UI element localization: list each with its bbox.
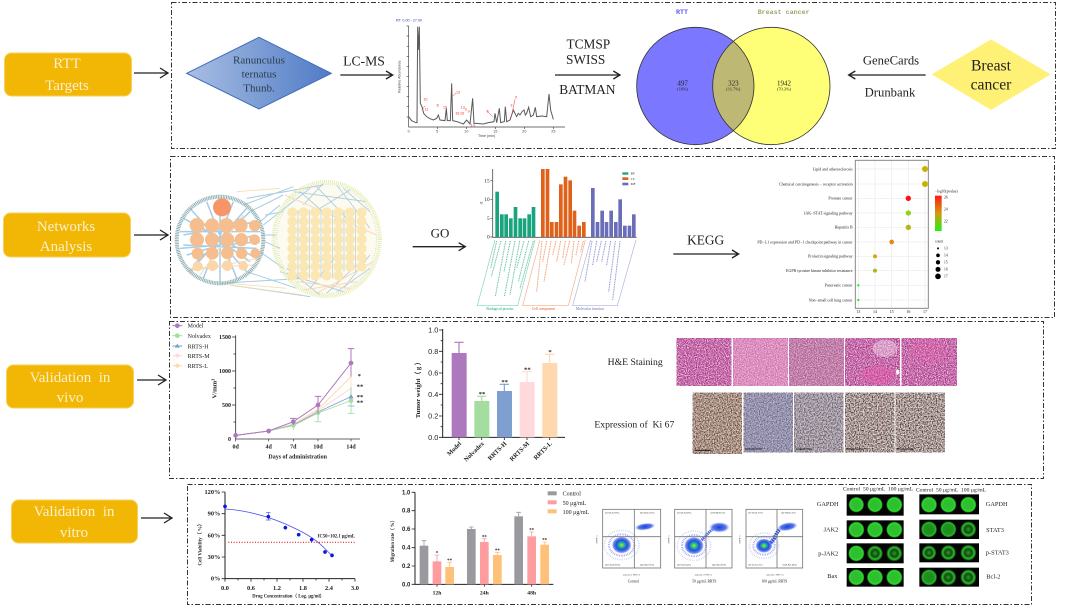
plot: control: Q2-UR(5.03%) — [640, 511, 655, 514]
chart: GO enrichment bars: 10 — [484, 197, 490, 203]
diamond: Breast cancer: cancer — [971, 76, 1012, 93]
chart: LC-MS chromatogram: 16 — [460, 112, 464, 116]
network diagram — [177, 182, 380, 297]
chart: cell viability dose response: 120% — [205, 489, 220, 496]
chart: tumour volume lines: 0 — [228, 437, 231, 443]
chart: LC-MS chromatogram: 13 — [461, 106, 465, 110]
step label: Validation in vivo: Validation in — [30, 370, 111, 386]
right section of network panel — [622, 160, 958, 314]
step label: Networks Analysis: Analysis — [40, 239, 92, 255]
chart: tumour weight bars: 0.2 — [428, 412, 438, 421]
protein labels: JAK2 — [824, 526, 838, 533]
chart: migration rate bars: ** — [482, 535, 487, 540]
chart: migration rate bars: 48h — [527, 591, 537, 597]
chart: tumour volume lines: ** — [357, 394, 364, 401]
chart: migration rate bars: 0.8 — [402, 509, 411, 515]
chart: LC-MS chromatogram: 11 — [425, 107, 428, 111]
arrow: GO — [413, 243, 465, 251]
plot: 100 μg/mL RRTS: Q4-LR(2.46%) — [783, 563, 797, 566]
chart: migration rate bars: ** — [447, 559, 453, 564]
plot: 50 μg/mL RRTS: Q3-LL(63.4%) — [677, 563, 691, 566]
chart: KEGG bubble plot: 17 — [923, 309, 927, 314]
chart: migration rate bars: ** — [542, 539, 548, 544]
plot: control: Q1-UL(0.93%) — [605, 511, 620, 514]
chart: cell viability dose response: 60% — [208, 532, 220, 539]
label: LC-MS: LC-MS — [343, 53, 385, 68]
labels: GeneCards, Drunbank: Drunbank — [865, 85, 916, 99]
arrow: Validation in vitro to panel — [141, 513, 172, 523]
step label: Validation in vitro: Validation in — [34, 504, 115, 520]
images: H&E stained sections — [677, 338, 957, 386]
left section of target panel — [187, 19, 620, 138]
chart: KEGG bubble plot: Lipid and atherosclerosis — [813, 166, 853, 171]
Venn diagram: 1942 — [777, 80, 791, 88]
right section of target panel — [637, 8, 1051, 145]
chart: KEGG bubble plot: Chemical carcinogenesis − receptor activation — [779, 181, 853, 186]
chart: migration rate bars: ** — [529, 529, 535, 534]
chart: tumour weight bars: 1.0 — [428, 326, 438, 335]
chart: GO enrichment bars: Cell component — [532, 307, 555, 311]
chart: tumour volume lines: V/mm³ — [211, 379, 218, 399]
plot: 50 μg/mL RRTS: Q4-LR(3.87%) — [712, 563, 726, 566]
chart: LC-MS chromatogram: 14 — [471, 124, 475, 128]
chart: migration rate bars: 0.0 — [402, 582, 411, 588]
step label: Validation in vitro — [12, 500, 138, 543]
chart: tumour volume lines: 0d — [233, 445, 239, 451]
chart: KEGG bubble plot: 13 — [856, 309, 860, 314]
chart: GO enrichment bars: Molecular function — [576, 307, 604, 311]
GO legend — [622, 172, 636, 186]
chart: LC-MS chromatogram: 6 — [487, 110, 489, 114]
chart: KEGG bubble plot: Prostate cancer — [828, 196, 853, 201]
legend: p-value colour scale — [935, 190, 958, 231]
protein labels — [817, 501, 1009, 580]
labels: TCMSP, SWISS, BATMAN: SWISS — [566, 52, 605, 67]
Venn diagram — [637, 8, 830, 145]
chart: KEGG bubble plot: Pancreatic cancer — [825, 283, 853, 288]
chart: cell viability dose response: IC50=102.1 μg/mL — [318, 534, 355, 539]
chart: tumour weight bars: Tumor weight（ g ） — [414, 358, 422, 418]
labels: GeneCards, Drunbank — [863, 54, 919, 99]
chart: tumour volume lines: 500 — [222, 403, 231, 409]
chart: cell viability dose response: 1.8 — [299, 585, 307, 592]
diamond: Breast cancer — [932, 39, 1051, 110]
chart: LC-MS chromatogram: 10 — [423, 98, 427, 102]
chart: tumour volume lines: * — [358, 373, 362, 380]
chart: tumour volume lines — [172, 323, 364, 461]
chart: KEGG bubble plot: PD−L1 expression and PD−1 checkpoint pathway in cancer — [757, 239, 853, 244]
Venn diagram: Breast cancer — [758, 8, 810, 16]
legend: treatment groups: RRTS-L — [188, 364, 208, 370]
step label: Validation in vivo: vivo — [57, 390, 83, 406]
chart: LC-MS chromatogram: 18 — [455, 112, 459, 116]
legend: p-value colour scale: 24 — [944, 207, 948, 211]
chart: migration rate bars: Migration rate（ %） — [390, 518, 396, 562]
chart: cell viability dose response: Cell Viability（ %） — [197, 521, 203, 565]
legend: count sizes: 15 — [944, 261, 948, 265]
legend: treatment groups: Model — [188, 324, 204, 330]
chart: tumour weight bars: 0.6 — [428, 369, 438, 378]
Venn diagram: RTT — [676, 8, 688, 16]
label: GO: GO — [431, 226, 449, 241]
chart: LC-MS chromatogram: 9 — [465, 108, 467, 112]
arrow: RTT Targets to panel — [134, 68, 168, 78]
legend: treatment groups: RRTS-M — [188, 354, 210, 360]
chart: GO enrichment bars: 0 — [487, 235, 490, 241]
arrow: KEGG — [673, 250, 739, 258]
chart: migration rate bars: 0.2 — [402, 564, 411, 570]
plot: 50 μg/mL RRTS: Q2-UR(28.5%) — [711, 511, 725, 514]
chart: tumour volume lines: 4d — [266, 445, 272, 451]
protein labels: GAPDH — [986, 501, 1008, 508]
column headers: Control 50 μg/mL 100 μg/mL — [843, 487, 914, 493]
chart: tumour weight bars: Model — [446, 440, 463, 458]
plot: control: PI-PE-A — [595, 535, 598, 543]
chart: migration rate bars: ** — [495, 549, 500, 554]
legend: count sizes — [935, 240, 948, 279]
arrow: Validation in vivo to panel — [137, 375, 166, 385]
chart: tumour volume lines: ** — [357, 399, 364, 406]
chart: cell viability dose response: 90% — [208, 511, 220, 518]
chart: LC-MS chromatogram: Relative Abundance — [398, 60, 402, 93]
arrow: databases to Venn — [555, 71, 620, 79]
left section of in vivo panel — [172, 323, 565, 463]
left section of in vitro panel — [197, 489, 590, 599]
chart: LC-MS chromatogram: 15 — [493, 130, 497, 134]
blots: right column — [919, 494, 979, 587]
diamond: Ranunculus ternatus Thunb.: Thunb. — [243, 82, 275, 94]
label: KEGG: KEGG — [687, 232, 725, 247]
chart: tumour weight bars — [414, 326, 565, 463]
Venn diagram: (70.3%) — [777, 87, 792, 92]
diamond: Ranunculus ternatus Thunb.: ternatus — [242, 68, 276, 80]
step label: RTT Targets — [4, 53, 132, 96]
chart: KEGG bubble plot: 16 — [906, 309, 910, 314]
Venn diagram: 323 — [728, 80, 739, 88]
chart: LC-MS chromatogram: 13 — [456, 90, 460, 94]
chart: GO enrichment bars: 15 — [484, 178, 490, 184]
panel: validation in vitro — [188, 484, 1032, 604]
legend: count sizes: 14 — [944, 254, 948, 258]
Venn diagram: (18%) — [677, 87, 689, 92]
chart: cell viability dose response: 0.0 — [221, 585, 229, 592]
images: Ki 67 stained sections — [693, 393, 945, 454]
labels: GeneCards, Drunbank: GeneCards — [863, 54, 919, 68]
chart: cell viability dose response: 2.4 — [325, 585, 334, 592]
chart: KEGG bubble plot: Prolactin signaling pathway — [808, 254, 853, 259]
chart: KEGG bubble plot: JAK−STAT signaling pathway — [804, 210, 853, 215]
legend: treatment groups: Nolvadex — [188, 334, 211, 340]
step label: RTT Targets: RTT — [53, 56, 81, 72]
chart: tumour volume lines: ** — [357, 383, 364, 390]
chart: LC-MS chromatogram: 5 — [436, 130, 438, 134]
protein labels: GAPDH — [817, 501, 839, 508]
chart: tumour weight bars: 0.0 — [428, 433, 438, 442]
chart: tumour weight bars: RRTS-L — [533, 440, 554, 462]
chart: tumour volume lines: 7d — [290, 445, 297, 451]
chart: migration rate bars: 24h — [480, 591, 490, 597]
chart: LC-MS chromatogram — [396, 19, 565, 138]
flow cytometry plots — [595, 509, 803, 584]
right section of in vivo panel — [594, 338, 957, 454]
plot: 50 μg/mL RRTS: PI-PE-A — [667, 535, 670, 543]
diamond: Ranunculus ternatus Thunb.: Ranunculus — [233, 54, 285, 66]
diamond: Breast cancer: Breast — [971, 58, 1012, 75]
GO legend: CC — [631, 177, 636, 181]
labels: TCMSP, SWISS, BATMAN — [559, 36, 616, 97]
Venn diagram: (11.7%) — [726, 87, 741, 92]
legend: concentrations: 50 μg/mL — [563, 501, 587, 507]
legend: p-value colour scale: 26 — [944, 196, 948, 200]
chart: KEGG bubble plot — [757, 160, 928, 314]
chart: LC-MS chromatogram: 3 — [510, 104, 512, 108]
chart: tumour volume lines: 10d — [313, 445, 323, 451]
chart: tumour weight bars: ** — [524, 366, 531, 373]
protein labels: Bcl-2 — [986, 573, 1000, 580]
chart: cell viability dose response — [197, 489, 359, 599]
chart: LC-MS chromatogram: 0 — [408, 130, 410, 134]
labels: TCMSP, SWISS, BATMAN: BATMAN — [559, 82, 616, 97]
legend: concentrations: Control — [563, 492, 581, 498]
chart: LC-MS chromatogram: 20 — [522, 130, 526, 134]
legend: p-value colour scale: 22 — [944, 219, 948, 223]
chart: LC-MS chromatogram: 8 — [437, 104, 439, 108]
plot: 100 μg/mL RRTS: Q3-LL(52.3%) — [748, 563, 763, 566]
step label: Validation in vitro: vitro — [60, 525, 88, 541]
plot: 100 μg/mL RRTS: annexin v FITC-A — [766, 574, 784, 577]
plot: control: Control — [628, 580, 639, 584]
legend: treatment groups — [172, 323, 211, 370]
chart: migration rate bars: * — [436, 552, 439, 557]
western blots — [817, 487, 1009, 587]
chart: LC-MS chromatogram: 9 — [515, 95, 517, 99]
plot: 100 μg/mL RRTS: Q2-UR(33.3%) — [781, 511, 796, 514]
chart: GO enrichment bars — [477, 169, 637, 311]
chart: KEGG bubble plot: 14 — [873, 309, 877, 314]
protein labels: Bax — [827, 573, 838, 580]
chart: tumour volume lines: Days of administration — [268, 455, 328, 461]
plot: 100 μg/mL RRTS — [739, 509, 803, 584]
chart: migration rate bars: 1.0 — [402, 490, 411, 496]
plot: 50 μg/mL RRTS: 50 μg/mL RRTS — [692, 580, 716, 584]
label: Expression of Ki 67: Expression of Ki 67 — [594, 420, 674, 431]
chart: tumour weight bars: 0.8 — [428, 347, 438, 356]
step label: Networks Analysis: Networks — [37, 219, 95, 235]
plot: control: annexin v FITC-A — [623, 574, 641, 577]
chart: tumour weight bars: * — [548, 349, 552, 356]
label: H&E Staining: H&E Staining — [608, 357, 663, 368]
chart: KEGG bubble plot: Non−small cell lung cancer — [809, 297, 853, 302]
chart: LC-MS chromatogram: 25 — [551, 130, 555, 134]
arrow: databases to Venn — [849, 71, 926, 79]
plot: 100 μg/mL RRTS: Q1-UL(0.17%) — [748, 511, 763, 514]
plot: control: Q4-LR(2.51%) — [640, 563, 654, 566]
legend: count sizes: 16 — [944, 268, 948, 272]
chart: migration rate bars: 12h — [433, 591, 442, 597]
chart: tumour weight bars: ** — [479, 391, 486, 398]
panel: network analysis — [170, 156, 1054, 318]
chart: cell viability dose response: 0% — [211, 576, 220, 583]
plot: 50 μg/mL RRTS — [667, 509, 732, 584]
chart: GO enrichment bars: Biological process — [486, 307, 514, 311]
chart: LC-MS chromatogram: 15 — [443, 106, 447, 110]
chart: tumour weight bars: Nolvadex — [463, 440, 486, 463]
chart: cell viability dose response: 0.6 — [247, 585, 255, 592]
legend: concentrations — [548, 491, 590, 516]
column headers — [843, 487, 987, 494]
chart: KEGG bubble plot: EGFR tyrosine kinase inhibitor resistance — [786, 268, 853, 273]
legend: treatment groups: RRTS-H — [188, 344, 209, 350]
plot: 50 μg/mL RRTS: Q1-UL(0.83%) — [677, 511, 692, 514]
Venn diagram: 497 — [677, 80, 688, 88]
labels: TCMSP, SWISS, BATMAN: TCMSP — [566, 36, 610, 51]
panel: validation in vivo — [170, 322, 1044, 478]
chart: LC-MS chromatogram: RT: 0.00 - 27.00 — [396, 19, 422, 23]
GO legend: BP — [631, 172, 635, 176]
plot: control — [595, 509, 661, 584]
plot: 100 μg/mL RRTS: PI-PE-A — [739, 535, 742, 543]
legend: count sizes: 17 — [944, 275, 948, 279]
protein labels: p-JAK2 — [818, 550, 838, 557]
chart: KEGG bubble plot: 15 — [890, 309, 894, 314]
GO legend: MF — [631, 182, 636, 186]
chart: cell viability dose response: Drug Concentration（ Log. μg/ml） — [252, 593, 324, 599]
chart: tumour weight bars: ** — [501, 379, 509, 386]
legend: count sizes: 13 — [944, 247, 948, 251]
chart: LC-MS chromatogram: 10 — [464, 130, 468, 134]
plot: 50 μg/mL RRTS: annexin v FITC-A — [695, 574, 712, 577]
arrow: Networks Analysis to panel — [134, 230, 168, 240]
diamond: Ranunculus ternatus Thunb. — [187, 37, 331, 109]
step label: RTT Targets: Targets — [45, 78, 89, 94]
legend: concentrations: 100 μg/mL — [563, 510, 590, 516]
chart: GO enrichment bars: 5 — [487, 216, 490, 222]
step label: Networks Analysis — [4, 213, 130, 257]
legend: p-value colour scale: −log10(pvalue) — [935, 190, 958, 194]
chart: tumour weight bars: RRTS-M — [509, 440, 531, 463]
chart: cell viability dose response: 3.0 — [351, 585, 359, 592]
chart: migration rate bars: 0.6 — [402, 527, 411, 533]
chart: GO enrichment bars: ct — [479, 201, 484, 204]
panel: target screening — [172, 2, 1056, 148]
legend: count sizes: count — [935, 240, 943, 244]
chart: cell viability dose response: 30% — [208, 554, 220, 561]
protein labels: STAT3 — [986, 527, 1004, 534]
plot: control: Q3-LL(85.82%) — [605, 563, 620, 566]
chart: KEGG bubble plot: Hepatitis B — [835, 225, 853, 230]
chart: LC-MS chromatogram: 9 — [468, 110, 470, 114]
arrow: LC-MS — [340, 71, 393, 79]
protein labels: p-STAT3 — [986, 549, 1009, 556]
chart: migration rate bars: 0.4 — [402, 546, 411, 552]
chart: tumour weight bars: 0.4 — [428, 390, 438, 399]
step label: Validation in vivo — [6, 365, 134, 408]
chart: tumour volume lines: 1500 — [219, 335, 231, 341]
chart: tumour volume lines: 1000 — [219, 369, 231, 375]
blots: left column — [847, 494, 904, 587]
left section of network panel — [177, 169, 637, 311]
column headers: Control 50 μg/mL 100 μg/mL — [916, 488, 987, 494]
chart: tumour weight bars: RRTS-H — [487, 440, 508, 462]
chart: tumour volume lines: 14d — [346, 445, 356, 451]
chart: LC-MS chromatogram: Time (min) — [478, 134, 495, 138]
chart: migration rate bars — [390, 490, 590, 597]
plot: 100 μg/mL RRTS: 100 μg/mL RRTS — [761, 580, 787, 584]
chart: cell viability dose response: 1.2 — [273, 585, 281, 592]
